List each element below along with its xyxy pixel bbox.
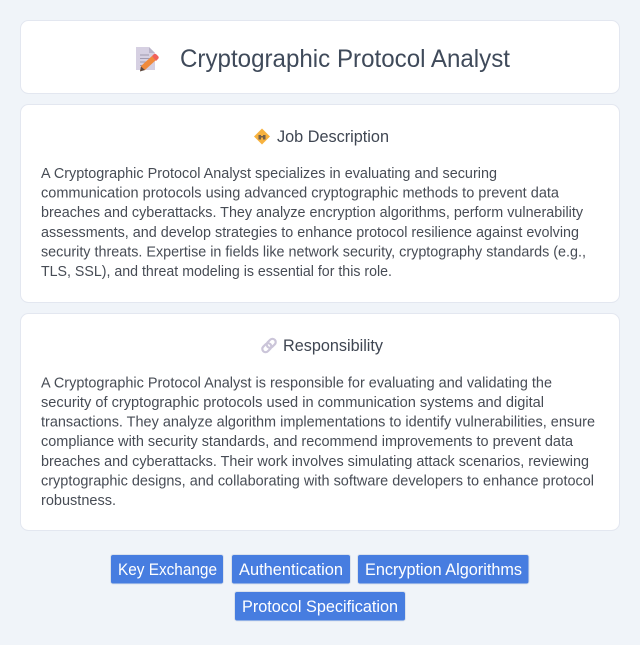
tag: encryption algorithms [358,554,529,584]
text: responsibility body: cryptographic designs, and collaborating with software developers to enhance protocol [41,473,594,489]
tags [110,554,529,621]
tag: key exchange: Key Exchange [118,560,217,579]
heading: job description: Job Description [277,127,389,146]
tag: encryption algorithms: Encryption Algorithms [365,560,522,579]
icon: chain link [261,337,277,354]
text: responsibility body: transactions. They analyze algorithm implementations to identify vulnerabilities, ensure [41,415,595,431]
text: responsibility body: A Cryptographic Protocol Analyst is responsible for evaluating and validating the [41,376,552,392]
text: responsibility body [41,376,595,509]
text: responsibility body: compliance with security standards, and recommend improvements to prevent data [41,434,574,450]
text: responsibility body: security of cryptographic protocols used in communication systems and digital [41,395,544,411]
text: responsibility body: breaches and cyberattacks. Their work involves simulating attack scenarios, reviewing [41,454,589,470]
panel: job description [20,104,620,302]
panel: title [20,20,620,94]
heading: responsibility: Responsibility [283,336,384,355]
icon: diamond sign [254,128,270,144]
text: job description body: breaches and cyberattacks. They analyze encryption algorithms, perform vulnerability [41,205,584,221]
heading: page title: Cryptographic Protocol Analyst [180,45,510,73]
tag: protocol specification: Protocol Specification [242,597,398,616]
text: job description body: security threats. Expertise in fields like network security, cryptography standards (e.g., [41,244,586,260]
text: responsibility body: robustness. [41,493,116,509]
text: job description body: TLS, SSL), and threat modeling is essential for this role. [41,264,392,280]
tag: authentication [232,554,350,584]
tag: key exchange [110,554,224,584]
text: job description body: assessments, and develop strategies to enhance protocol resilience against evolving [41,225,579,241]
panel: responsibility [20,314,620,530]
text: job description body: communication protocols using advanced cryptographic methods to prevent data [41,186,560,202]
text: job description body: A Cryptographic Protocol Analyst specializes in evaluating and securing [41,166,497,182]
text: job description body [41,166,586,280]
tag: protocol specification [234,592,406,621]
icon: document with pencil [136,47,159,72]
tag: authentication: Authentication [239,560,343,579]
